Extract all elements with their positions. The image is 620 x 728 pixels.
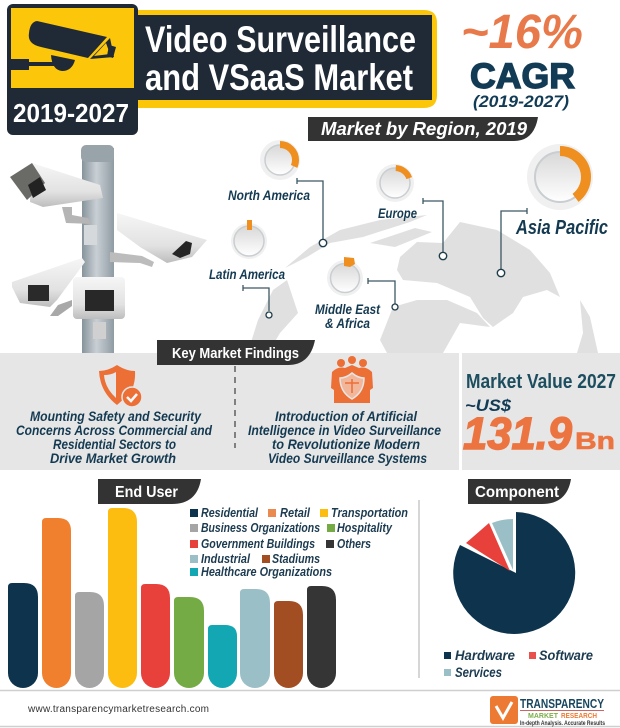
CAGR callout: (2019-2027)	[473, 92, 569, 111]
CAGR callout	[461, 6, 583, 111]
region: Asia Pacific	[497, 144, 608, 277]
legend: component: Hardware	[455, 647, 515, 663]
legend: end user: Government Buildings	[201, 536, 315, 551]
CAGR callout: CAGR	[470, 57, 575, 96]
pole	[81, 145, 114, 353]
panel: market value: ~US$	[465, 396, 512, 415]
region: Latin America	[209, 220, 285, 318]
legend: component: Services	[455, 664, 502, 680]
region: Europe: Europe	[378, 206, 417, 221]
legend: component	[444, 647, 593, 680]
panel: market value	[462, 353, 620, 470]
title banner: Video Surveillance	[145, 19, 416, 60]
finding text: safety and security	[16, 408, 212, 466]
heading: key market findings	[157, 340, 315, 365]
camera: front	[73, 277, 125, 339]
finding text: artificial intelligence	[248, 408, 441, 466]
legend: end user	[190, 505, 408, 579]
heading: component: Component	[475, 484, 560, 501]
camera: right	[110, 213, 207, 267]
region: North America: North America	[228, 188, 310, 203]
legend: end user: Business Organizations	[201, 520, 320, 535]
icon: team with shield	[331, 356, 373, 403]
bar chart: end user	[8, 508, 336, 688]
icon: logo mark	[490, 696, 518, 724]
legend: end user: Retail	[280, 505, 310, 520]
finding text: safety and security: Mounting Safety and Security	[30, 408, 202, 424]
legend: end user: Stadiums	[272, 551, 320, 566]
camera cluster photo	[10, 145, 207, 353]
heading: component	[468, 479, 571, 504]
camera: lower left	[12, 258, 85, 316]
finding text: artificial intelligence: Video Surveillance Systems	[268, 450, 427, 466]
finding text: safety and security: Concerns Across Commercial and	[16, 422, 212, 438]
legend: component: Software	[539, 647, 593, 663]
region: Latin America: Latin America	[209, 267, 285, 282]
pie chart: component	[453, 512, 575, 634]
heading: end user: End User	[115, 484, 178, 501]
heading: key market findings: Key Market Findings	[172, 345, 299, 362]
footer url: www.transparencymarketresearch.com	[27, 704, 209, 715]
legend: end user: Healthcare Organizations	[201, 564, 332, 579]
finding text: artificial intelligence: Introduction of Artificial	[275, 408, 418, 424]
title banner: and VSaaS Market	[145, 57, 413, 98]
icon: surveillance camera	[11, 21, 116, 71]
region: North America	[228, 140, 327, 247]
company logo: In-depth Analysis. Accurate Results	[520, 721, 606, 727]
logo panel: camera and years	[7, 4, 138, 135]
region: Middle East and Africa: & Africa	[325, 316, 370, 331]
world map	[247, 215, 598, 355]
company logo	[490, 696, 606, 727]
company logo: RESEARCH	[561, 713, 597, 720]
panel: market value: Bn	[575, 428, 615, 455]
title banner	[138, 10, 437, 108]
legend: end user: Industrial	[201, 551, 250, 566]
CAGR callout: ~16%	[461, 6, 583, 59]
finding text: safety and security: Residential Sectors to	[53, 436, 176, 452]
finding text: safety and security: Drive Market Growth	[50, 450, 176, 466]
region: Middle East and Africa: Middle East	[315, 302, 380, 317]
legend: end user: Hospitality	[337, 520, 393, 535]
heading: end user	[98, 479, 201, 504]
year range: 2019-2027	[13, 98, 129, 128]
legend: end user: Transportation	[331, 505, 408, 520]
finding text: artificial intelligence: to Revolutionize Modern	[272, 436, 420, 452]
finding text: artificial intelligence: Intelligence in Video Surveillance	[248, 422, 441, 438]
company logo: MARKET	[528, 713, 559, 720]
camera: upper left	[10, 163, 103, 224]
region: Europe	[376, 164, 447, 260]
heading: market by region: Market by Region, 2019	[321, 119, 527, 139]
icon: shield with check	[99, 365, 142, 407]
region: Middle East and Africa	[315, 257, 398, 331]
panel: key market findings	[0, 340, 459, 470]
legend: end user: Residential	[201, 505, 258, 520]
legend: end user: Others	[337, 536, 371, 551]
panel: market value: 131.9	[463, 408, 572, 459]
